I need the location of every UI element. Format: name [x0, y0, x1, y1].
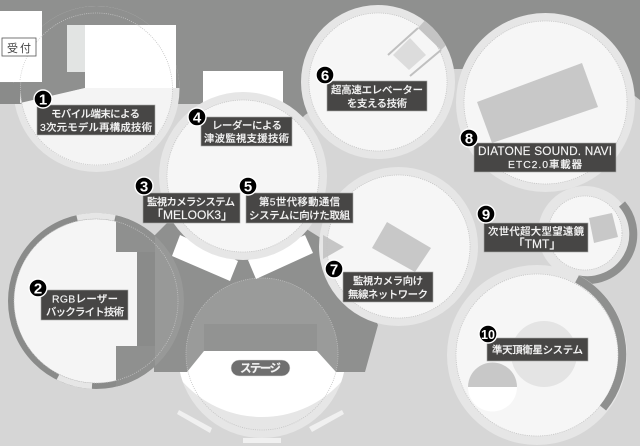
label 3: surveillance camera MELOOK3: 「MELOOK3」	[151, 207, 233, 222]
label 8: DIATONE SOUND NAVI: 8	[465, 130, 473, 148]
label 10: quasi-zenith satellite: 10	[481, 327, 495, 342]
label 5: 5G mobile communication	[239, 177, 353, 223]
label 4: tsunami monitoring radar: レーダーによる	[212, 119, 282, 132]
label 8: DIATONE SOUND NAVI: ETC2.0車載器	[508, 158, 583, 171]
label 9: TMT telescope	[477, 205, 588, 252]
label 2: RGB laser backlight	[29, 279, 128, 320]
label 2: RGB laser backlight: RGBレーザー	[52, 294, 118, 306]
label 1: mobile 3D reconstruction: モバイル端末による	[51, 108, 140, 120]
exhibit circle 2	[11, 205, 185, 396]
label 6: high-speed elevator: を支える技術	[347, 97, 408, 110]
label 8: DIATONE SOUND NAVI: DIATONE SOUND. NAVI	[478, 144, 612, 158]
label 3: surveillance camera MELOOK3: 監視カメラシステム	[147, 196, 235, 208]
label 1: mobile 3D reconstruction	[34, 90, 155, 135]
white booth behind circle 4	[203, 71, 283, 111]
label 6: high-speed elevator	[316, 66, 427, 111]
label 8: DIATONE SOUND NAVI	[460, 129, 616, 172]
stage pill label: ステージ	[240, 362, 282, 375]
label 2: RGB laser backlight: 2	[34, 280, 42, 298]
label 4: tsunami monitoring radar: 津波監視支援技術	[204, 132, 290, 145]
exhibit circle 6	[301, 5, 462, 159]
front edge bars	[177, 410, 344, 443]
exhibit circle 7	[319, 167, 478, 326]
label 9: TMT telescope: 次世代超大型望遠鏡	[488, 225, 585, 238]
label 9: TMT telescope: 9	[482, 206, 490, 224]
reception area	[0, 11, 42, 82]
label 1: mobile 3D reconstruction: 3次元モデル再構成技術	[40, 121, 153, 134]
exhibit circle 4	[159, 92, 327, 260]
upper dark wall area	[0, 0, 640, 130]
label 5: 5G mobile communication: システムに向けた取組	[249, 209, 351, 222]
stage pill label	[231, 360, 290, 376]
exhibit circle 9	[538, 186, 633, 280]
label 5: 5G mobile communication: 5	[244, 178, 252, 196]
central dark area	[154, 210, 378, 372]
label 1: mobile 3D reconstruction: 1	[39, 92, 47, 108]
label 5: 5G mobile communication: 第5世代移動通信	[259, 196, 341, 208]
label 7: camera wireless network: 監視カメラ向け	[353, 274, 423, 288]
exhibit circle 8	[456, 13, 635, 192]
label 10: quasi-zenith satellite: 準天頂衛星システム	[492, 344, 583, 356]
label 3: surveillance camera MELOOK3	[135, 177, 240, 223]
stage upper zone and stage	[186, 278, 338, 430]
exhibit circle 10	[447, 265, 627, 445]
label 6: high-speed elevator: 6	[321, 68, 329, 84]
label 9: TMT telescope: 「TMT」	[513, 236, 561, 251]
white seating wedges	[172, 235, 313, 281]
label 7: camera wireless network: 7	[330, 262, 338, 278]
stage floor and white stage crescent	[180, 372, 344, 438]
label 7: camera wireless network: 無線ネットワーク	[348, 288, 428, 301]
label 4: tsunami monitoring radar: 4	[193, 110, 202, 126]
label 2: RGB laser backlight: バックライト技術	[46, 306, 125, 318]
label 6: high-speed elevator: 超高速エレベーター	[331, 84, 423, 96]
exhibit circle 1	[14, 6, 180, 172]
label 10: quasi-zenith satellite	[479, 325, 588, 361]
reception sign: 受 付	[7, 42, 31, 55]
label 3: surveillance camera MELOOK3: 3	[140, 178, 148, 196]
label 4: tsunami monitoring radar	[188, 108, 292, 146]
label 7: camera wireless network	[325, 260, 433, 302]
